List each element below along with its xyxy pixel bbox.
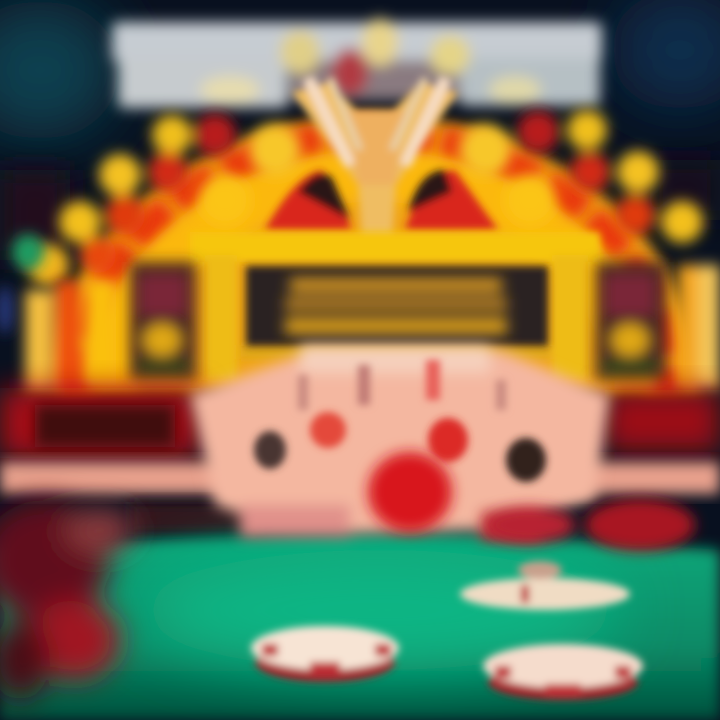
yellow header beam and pillars (190, 232, 600, 380)
fan of cards at arch top (292, 78, 458, 240)
sign text lines (285, 278, 507, 334)
arch amber fill (50, 115, 700, 395)
dark red lower band (0, 388, 720, 534)
red and black triangle right (405, 170, 498, 230)
arch inner yellow band (112, 175, 631, 390)
left slot panel (130, 262, 196, 380)
marquee arch (50, 115, 700, 395)
card suit marks (254, 360, 546, 482)
fanned playing cards (190, 345, 610, 540)
red and black triangle left (265, 170, 352, 230)
chip stacks on the right (485, 499, 695, 551)
side stripes of arch (25, 265, 720, 395)
chip stacks on the left (0, 500, 135, 700)
arch red band (78, 135, 663, 395)
white chip upper right (460, 561, 630, 610)
white chip lower right (483, 644, 643, 700)
white chip near centre (251, 626, 399, 682)
green poker table (0, 535, 720, 720)
right slot panel (596, 262, 666, 380)
blurred headline block (112, 18, 602, 108)
red poker chip (368, 452, 452, 532)
bulb highlights (27, 110, 703, 286)
central sign panel (246, 266, 548, 346)
green and blue side accents (0, 234, 44, 334)
